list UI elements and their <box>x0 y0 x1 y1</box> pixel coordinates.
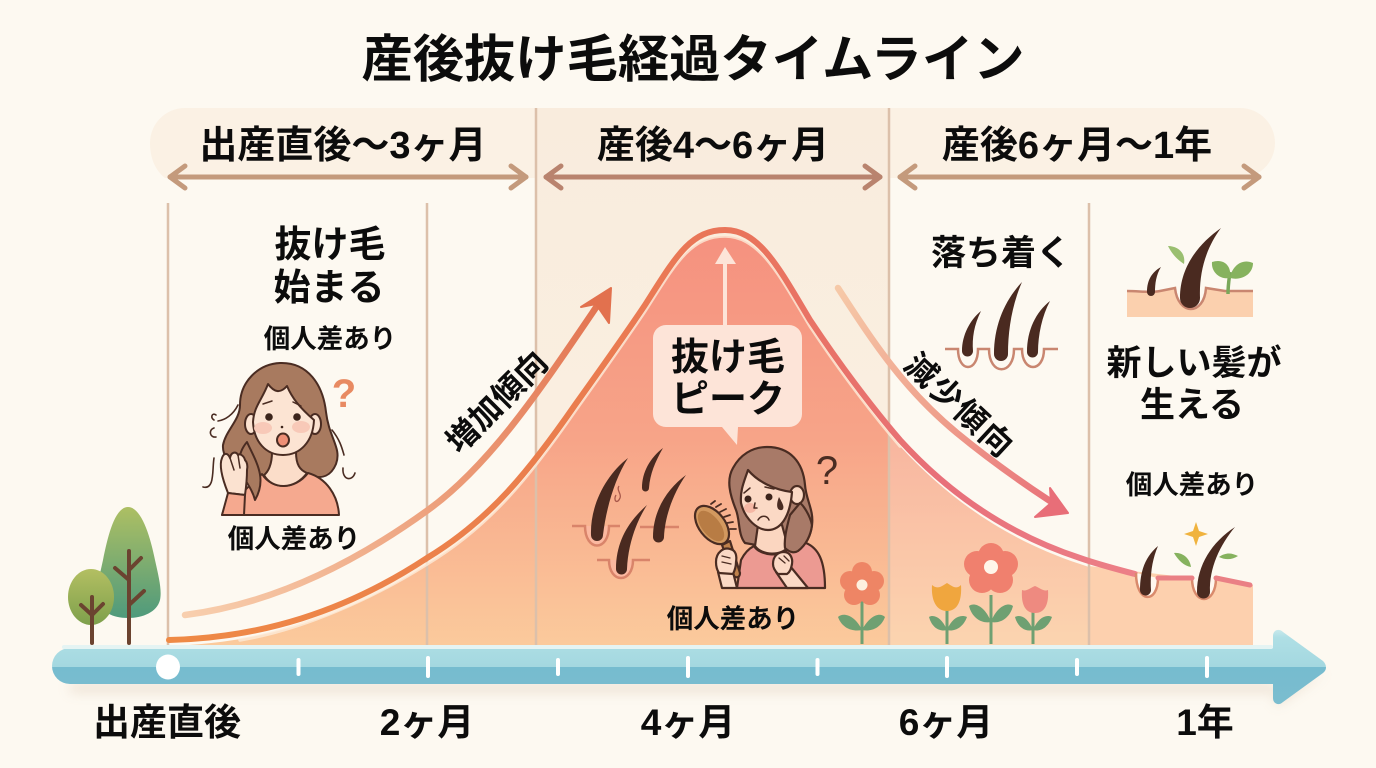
brows and mouth <box>744 487 774 520</box>
new hair skin area <box>1089 566 1253 645</box>
timeline start marker <box>156 654 180 680</box>
icon: new hair at curve end <box>1133 522 1253 604</box>
area under hair-loss curve <box>166 236 1253 646</box>
right arm <box>776 566 808 588</box>
icon: calm hair roots <box>945 282 1058 369</box>
bristles <box>711 501 736 529</box>
phase arrow 1 <box>170 166 526 188</box>
note: individual differences 1: 個人差あり <box>264 324 396 354</box>
heading: new hair grows: 生える <box>1140 386 1244 425</box>
heading: hair loss begins: 抜け毛 <box>274 224 386 265</box>
finger lines <box>722 556 789 564</box>
brush head <box>688 500 736 550</box>
brows <box>263 401 301 406</box>
hair-loss curve line <box>169 230 1135 640</box>
callout: hair loss peak <box>653 325 802 445</box>
timeline labels: 2ヶ月 <box>380 702 474 743</box>
eyes <box>265 413 301 428</box>
timeline ticks <box>296 656 1209 678</box>
hand <box>221 453 247 495</box>
mouth <box>277 434 289 446</box>
note: individual differences 3: 個人差あり <box>667 604 799 634</box>
heading: hair loss begins <box>274 224 386 308</box>
heading: new hair grows <box>1106 344 1282 425</box>
tear <box>777 497 783 510</box>
neck <box>755 525 788 554</box>
note: individual differences 2: 個人差あり <box>228 524 360 554</box>
trend label: decreasing: 減少傾向 <box>897 346 1021 465</box>
arrow: decreasing trend <box>838 288 1068 517</box>
icon: trees <box>68 507 161 643</box>
fingers <box>230 455 240 470</box>
question mark: orange: ? <box>332 372 356 416</box>
arrow: increasing trend <box>185 288 611 615</box>
icon: new hair growth with sprout <box>1127 228 1253 317</box>
phase arrow 3 <box>900 166 1259 188</box>
icon: surprised woman <box>203 363 355 515</box>
body <box>222 473 339 515</box>
left arm <box>718 572 737 588</box>
hair <box>729 447 812 552</box>
timeline labels: 1年 <box>1176 702 1234 743</box>
blush <box>254 421 310 434</box>
icon: flower group <box>929 543 1052 644</box>
brush handle <box>722 541 740 577</box>
left hand <box>716 549 736 574</box>
face <box>741 470 792 530</box>
hair back <box>223 363 338 500</box>
phase heading 2: 産後4〜6ヶ月 <box>597 125 829 167</box>
right hand <box>773 552 792 574</box>
title: 産後抜け毛経過タイムライン <box>362 31 1024 88</box>
trend label: increasing: 増加傾向 <box>439 344 555 460</box>
heading: hair loss begins: 始まる <box>274 267 384 308</box>
timeline shadow <box>70 672 1326 706</box>
blush and eyes <box>744 494 772 513</box>
icon: falling hair roots <box>572 448 686 578</box>
face <box>253 384 314 455</box>
phase heading 3: 産後6ヶ月〜1年 <box>942 125 1212 167</box>
callout: hair loss peak arrow <box>715 247 736 328</box>
body <box>737 543 825 588</box>
timeline labels <box>93 702 1234 743</box>
column dividers <box>168 108 1089 645</box>
timeline arrow <box>52 630 1326 706</box>
timeline labels: 4ヶ月 <box>641 702 735 743</box>
question mark: dark: ? <box>816 449 838 493</box>
callout: hair loss peak: ピーク <box>671 379 785 421</box>
flying hairs <box>203 405 355 487</box>
lighter fill of settling period <box>889 434 1089 645</box>
lock of hair <box>239 442 261 500</box>
heading: settling down: 落ち着く <box>931 234 1071 273</box>
panel: peak period column <box>536 108 889 645</box>
note: individual differences 4: 個人差あり <box>1126 470 1258 500</box>
ears <box>245 414 257 434</box>
icon: worried woman with brush <box>688 447 825 588</box>
phase header band <box>150 108 1275 178</box>
phase heading 1: 出産直後〜3ヶ月 <box>199 125 487 167</box>
timeline labels: 6ヶ月 <box>899 702 993 743</box>
timeline labels: 出産直後 <box>93 702 241 743</box>
icon: peak flower <box>838 562 885 644</box>
callout: hair loss peak: 抜け毛 <box>671 337 785 379</box>
timeline bar <box>52 630 1326 704</box>
neck <box>264 452 307 486</box>
phase arrow 2 <box>546 166 880 188</box>
sleeve <box>222 493 245 515</box>
heading: new hair grows: 新しい髪が <box>1106 344 1282 383</box>
hair lock over shoulder <box>785 503 812 552</box>
ear <box>790 486 804 504</box>
